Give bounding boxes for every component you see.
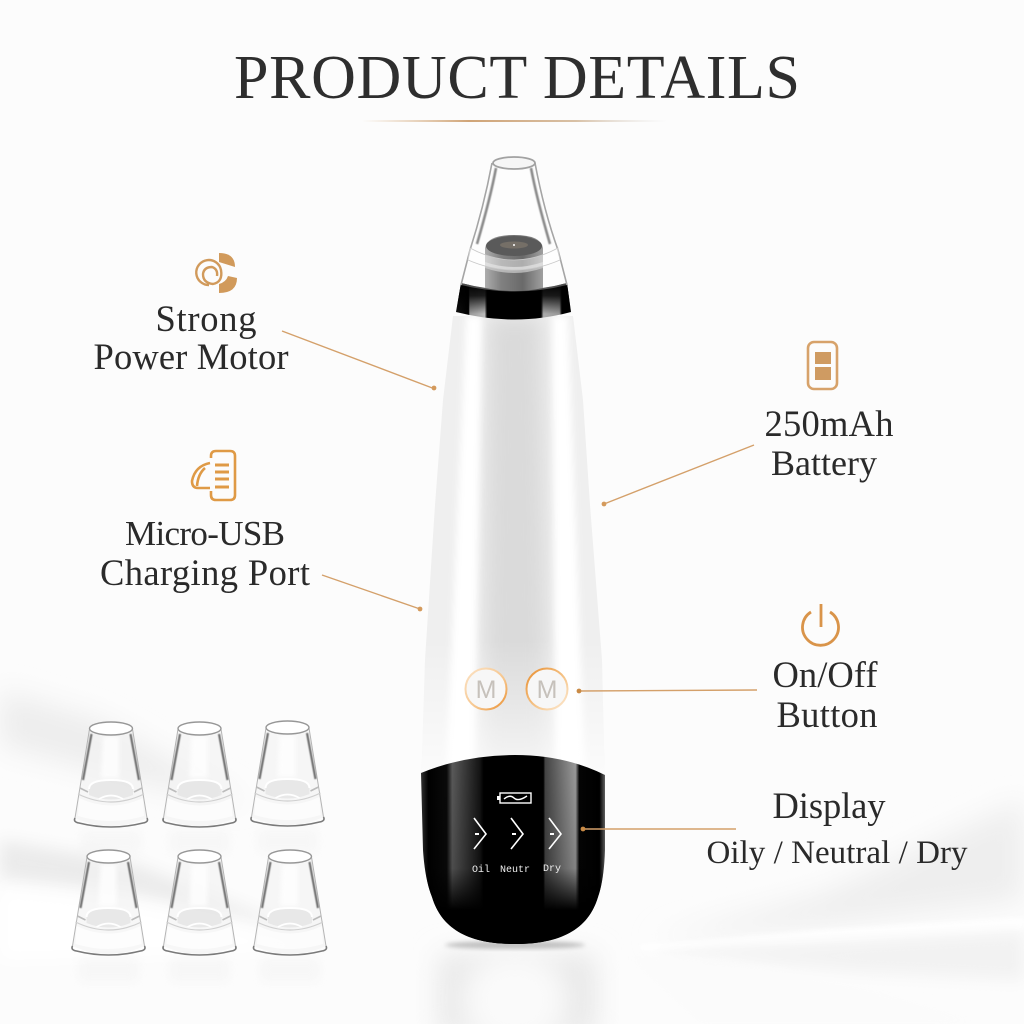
black collar [456, 283, 571, 320]
leader line [579, 690, 757, 691]
skin type labels [472, 864, 561, 876]
skin type chevrons [474, 818, 561, 849]
skin type labels: Dry [543, 864, 561, 875]
M button right: M [537, 676, 557, 704]
replacement nozzles [72, 721, 326, 982]
title: PRODUCT DETAILS [234, 44, 800, 112]
M button left [466, 668, 506, 710]
leader line [322, 575, 420, 609]
device shadow [445, 941, 585, 949]
skin type labels: Neutr [500, 865, 530, 876]
callout: micro-usb charging port [100, 451, 422, 611]
callout: battery: Battery [771, 443, 877, 483]
leader line [583, 828, 736, 830]
callout: on/off button: Button [776, 694, 878, 735]
skin type labels: Oil [472, 864, 490, 876]
M button right [526, 668, 568, 710]
icon: port [192, 451, 235, 500]
icon: battery [808, 342, 837, 389]
label: Micro-USB [125, 514, 285, 553]
callout: battery [602, 342, 894, 506]
white device body [424, 316, 602, 756]
leader line [282, 331, 435, 389]
callout: strong power motor [94, 253, 436, 390]
black display base [421, 755, 605, 944]
transparent tip [461, 157, 567, 292]
icon: motor [196, 253, 237, 293]
nozzle 5 [163, 850, 236, 982]
product: blackhead remover device [415, 157, 615, 949]
label: Display [772, 785, 886, 826]
inner nozzle core [485, 235, 543, 291]
callout: display [581, 785, 968, 871]
label: 250mAh [764, 403, 894, 444]
nozzle 2 [163, 722, 236, 854]
nozzle 3 [251, 721, 324, 853]
callout: display: Oily / Neutral / Dry [706, 835, 968, 871]
M button left: M [476, 676, 496, 704]
callout: on/off button [577, 604, 878, 735]
nozzle 1 [74, 722, 148, 854]
icon: power [803, 604, 839, 645]
callout: micro-usb charging port: Charging Port [100, 552, 310, 593]
label: On/Off [772, 654, 878, 695]
leader line [604, 445, 754, 504]
battery indicator [497, 793, 531, 803]
callout: strong power motor: Power Motor [94, 336, 288, 377]
nozzle 6 [254, 850, 326, 982]
label: Strong [156, 298, 256, 339]
nozzle 4 [72, 850, 145, 982]
